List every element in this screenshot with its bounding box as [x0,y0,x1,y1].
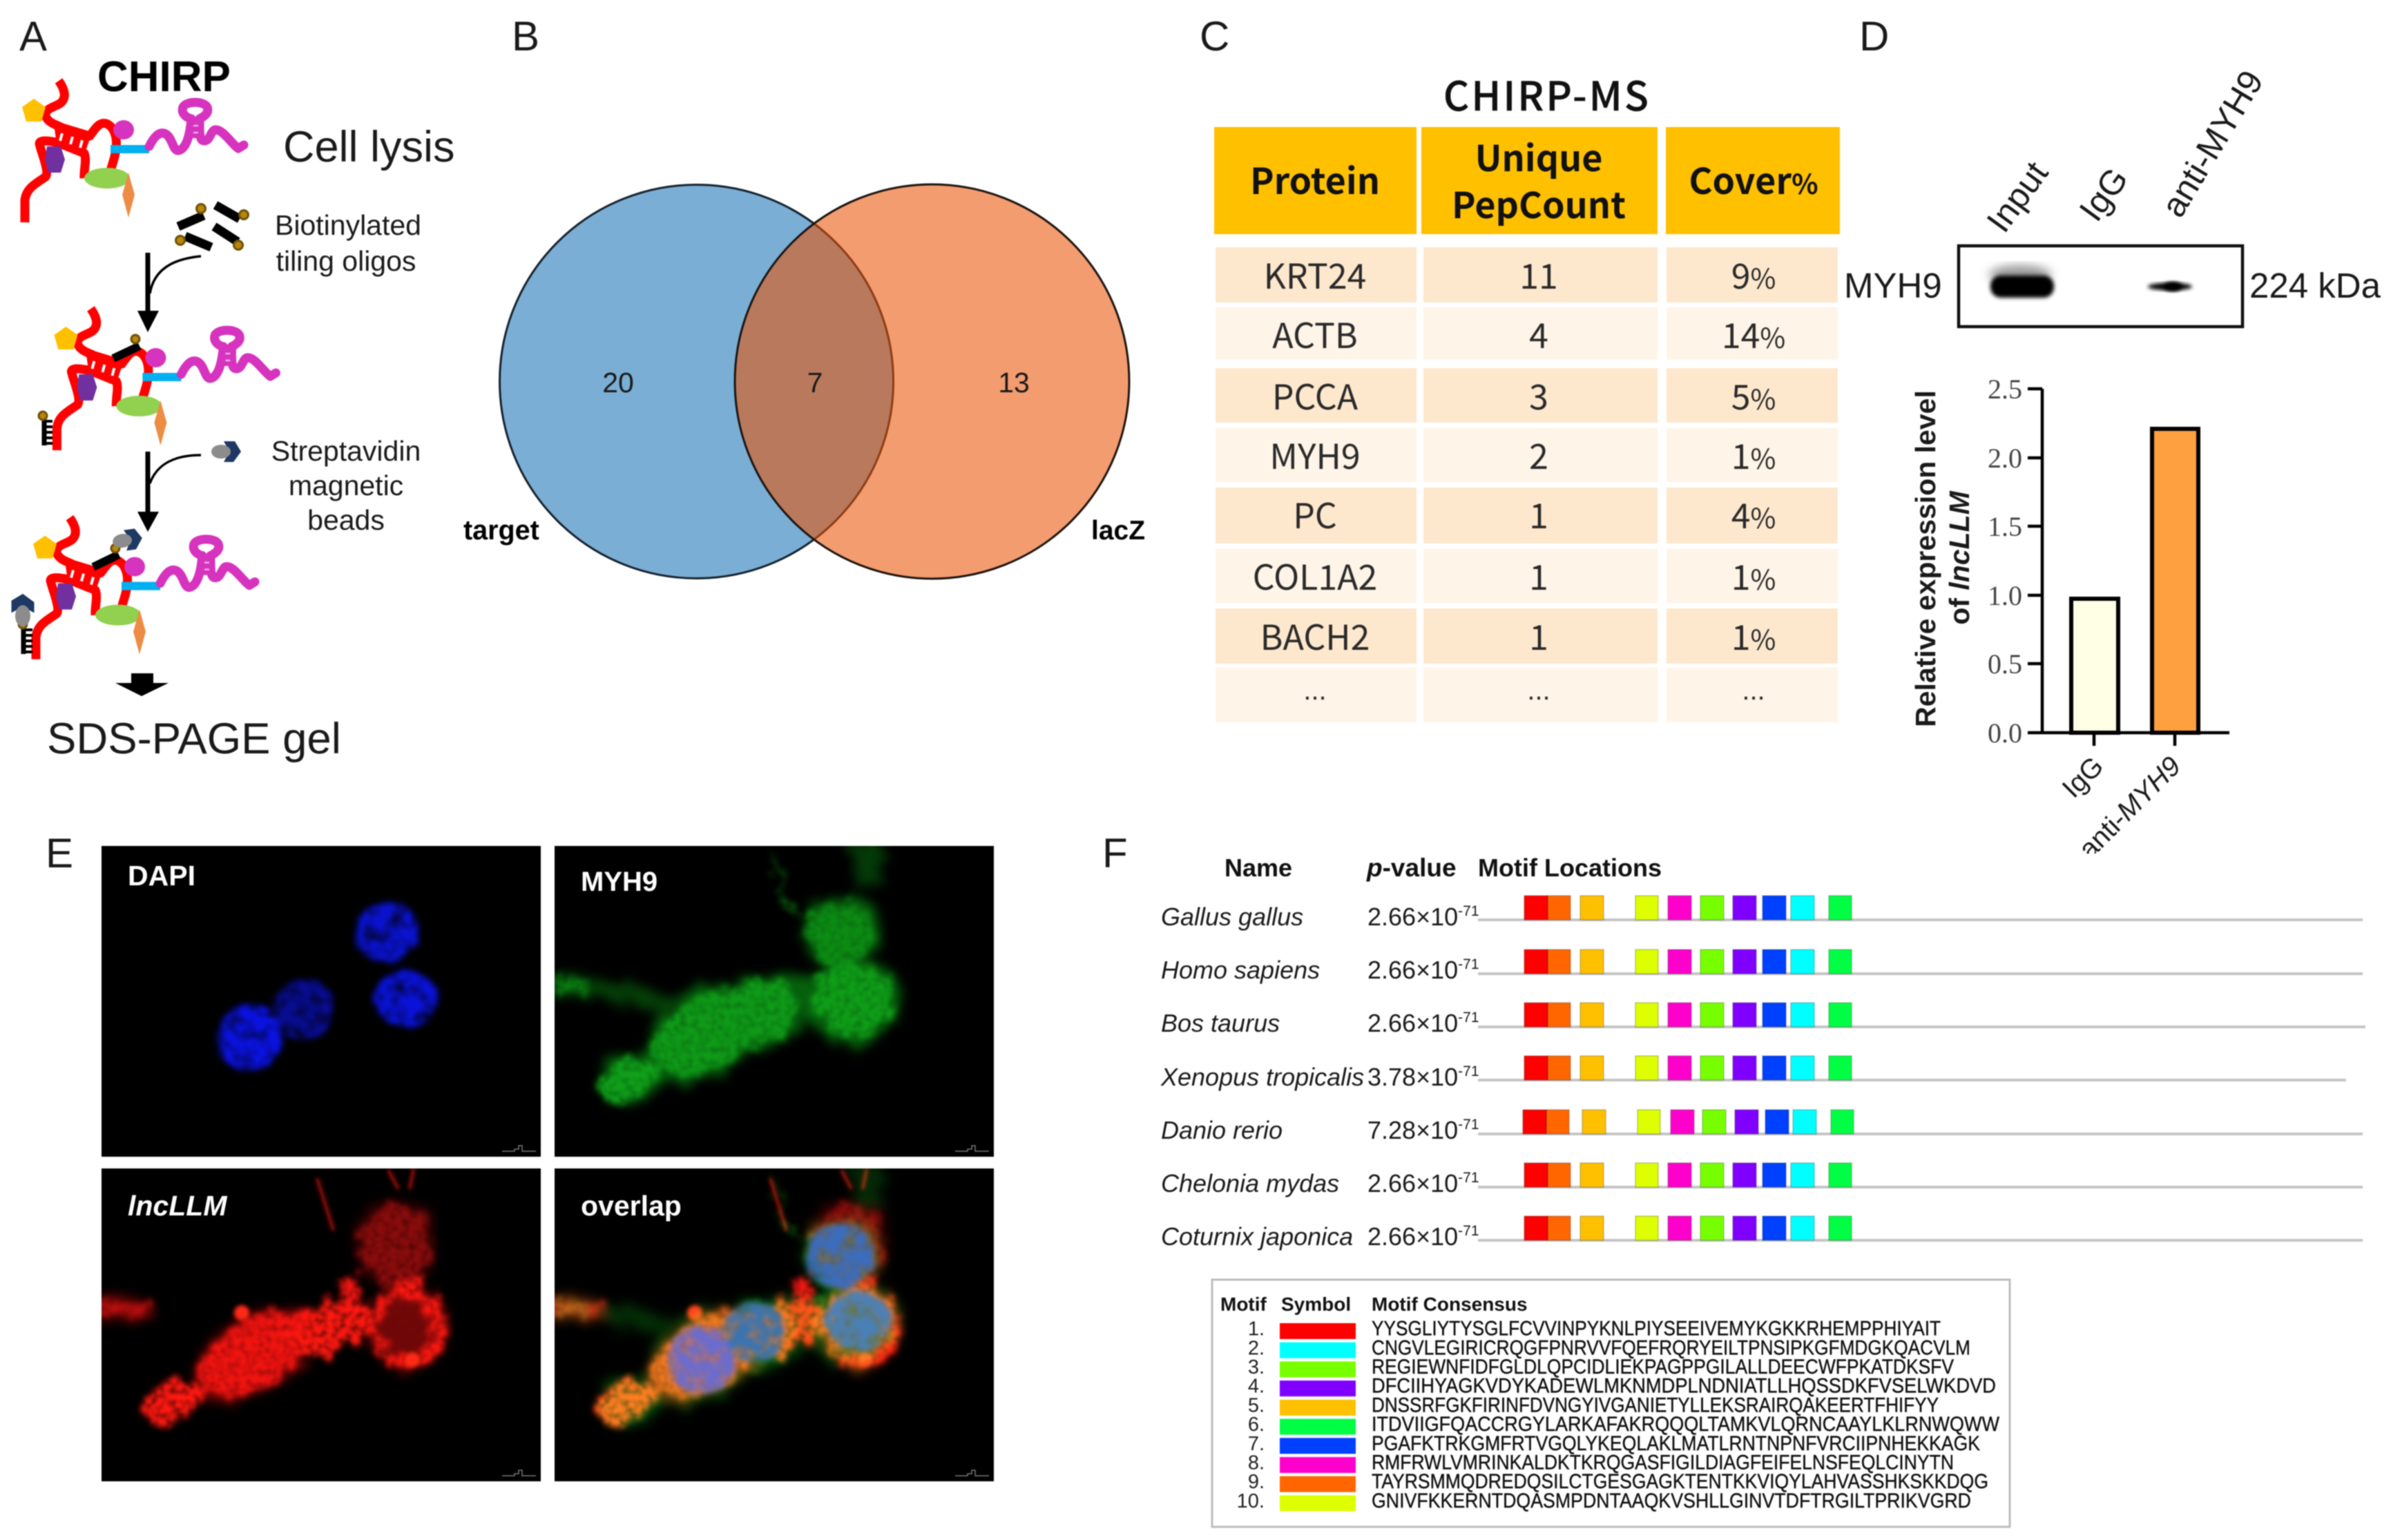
motif legend box [1212,1280,2010,1527]
row: Gallus gallus: Gallus gallus [1161,903,1303,931]
table body text: 1% [1731,610,1776,660]
axis title: Relative expression level [1910,390,1941,727]
value: lacZ only: 13 [998,367,1030,398]
legend consensus sequences: REGIEWNFIDFGLDLQPCIDLIEKPAGPPGILALLDEECWFPKATDKSFV [1372,1356,1954,1378]
table body text: COL1A2 [1253,550,1377,600]
table body text: 1% [1731,430,1776,479]
western blot box [1959,246,2243,327]
row: Gallus gallus [1161,896,2363,931]
bar: IgG [2071,599,2118,733]
table body text: 1 [1529,610,1548,660]
legend numbers: 1. [1248,1318,1265,1340]
table body text: 5% [1731,370,1776,420]
row: Coturnix japonica: -71 [1458,1223,1479,1239]
legend numbers [1237,1318,1265,1512]
label: biotinylated tiling oligos [275,209,421,277]
column headers: p-value [1366,854,1457,882]
legend numbers: 5. [1248,1394,1265,1416]
axis tick values: 0.0 [1988,718,2022,749]
panel label B: B [512,13,539,59]
image: DAPI: DAPI [128,860,195,892]
bar: anti-MYH9 [2152,429,2198,733]
axes [2028,389,2229,746]
icon: bound oligos second step [39,335,140,445]
legend consensus sequences: GNIVFKKERNTDQASMPDNTAAQKVSHLLGINVTDFTRGILTPRIKVGRD [1372,1490,1971,1512]
label: streptavidin magnetic beads: beads [307,504,385,536]
legend consensus sequences: PGAFKTRKGMFRTVGQLYKEQLAKLMATLRNTNPNFVRCIIPNHEKKAGK [1372,1432,1980,1455]
row: Xenopus tropicalis: Xenopus tropicalis [1160,1063,1364,1091]
arrow: to gel [115,673,169,696]
panel label C: C [1200,13,1229,59]
legend consensus sequences: RMFRWLVMRINKALDKTKRQGASFIGILDIAGFEIFELNSFEQLCINYTN [1372,1452,1954,1474]
axis tick values [1988,374,2022,749]
row: Coturnix japonica: Coturnix japonica [1161,1222,1353,1251]
table row backgrounds [1216,247,1838,722]
column headers: Motif Locations [1478,854,1662,882]
legend swatches [1280,1323,1356,1511]
table body text: MYH9 [1269,430,1361,479]
legend numbers: 8. [1248,1452,1265,1474]
row: Danio rerio: -71 [1458,1117,1479,1133]
label: lacZ: lacZ [1091,516,1145,546]
arrow: bead addition [137,452,201,532]
table body text: 9% [1731,249,1776,299]
axis tick values: 1.5 [1988,511,2022,542]
label: biotinylated tiling oligos: tiling oligos [276,245,416,277]
label: 224 kDa: 224 kDa [2249,266,2381,305]
molecule: with oligos bound [54,309,276,450]
circle: target [500,185,894,579]
image: MYH9 [551,843,994,1157]
panel label A: A [19,13,47,59]
legend consensus sequences: DFCIIHYAGKVDYKADEWLMKNMDPLNDNIATLLHQSSDKFVSELWKDVD [1372,1375,1996,1398]
legend consensus sequences: DNSSRFGKFIRINFDVNGYIVGANIETYLLEKSRAIRQAKEERTFHIFYY [1372,1394,1939,1416]
image: lncLLM [98,1168,541,1481]
label: streptavidin magnetic beads: Streptavidin [271,435,421,467]
row: Coturnix japonica [1161,1216,2363,1251]
column headers [1225,854,1662,882]
row: Bos taurus: 2.66×10 [1367,1009,1458,1037]
axis tick values: 2.5 [1988,374,2022,405]
label: streptavidin magnetic beads [271,435,421,536]
row: Chelonia mydas: -71 [1458,1170,1479,1186]
axis tick values: 1.0 [1988,580,2022,611]
panel label E: E [46,830,73,876]
panel B: Venn diagram [463,13,1145,579]
row: Danio rerio: 7.28×10 [1367,1116,1458,1144]
table body text: 4 [1529,309,1548,358]
table header: Cover% [1689,153,1818,204]
legend headers [1220,1293,1528,1315]
axis title [1910,390,1975,727]
image: overlap: overlap [581,1190,682,1222]
axis tick values: 0.5 [1988,648,2022,680]
legend headers: Motif [1220,1293,1267,1315]
table header [1214,127,1840,234]
blot lane labels: anti-MYH9 [2153,64,2271,224]
legend numbers: 2. [1248,1337,1265,1359]
molecule: lncRNA with proteins, cell lysis step [22,81,244,222]
axis title: of lncLLM [1943,490,1975,625]
row: Bos taurus: Bos taurus [1161,1009,1280,1037]
icon: streptavidin bead [211,441,241,462]
panel E: immunofluorescence images [46,830,994,1481]
icon: bound oligos with beads [11,528,144,654]
legend numbers: 3. [1248,1356,1265,1378]
legend numbers: 4. [1248,1376,1265,1398]
row: Gallus gallus: 2.66×10 [1367,903,1458,931]
legend consensus sequences [1372,1318,2000,1512]
category labels: anti-MYH9 [2073,751,2187,865]
value: overlap: 7 [807,367,823,398]
table body text: 11 [1519,249,1558,299]
table body text: 2 [1529,430,1548,479]
row: Danio rerio: Danio rerio [1161,1116,1283,1144]
table header: Protein [1250,153,1380,204]
row: Homo sapiens [1161,950,2363,984]
legend consensus sequences: YYSGLIYTYSGLFCVVINPYKNLPIYSEEIVEMYKGKKRHEMPPHIYAIT [1372,1318,1941,1340]
circle: lacZ [735,184,1129,579]
legend numbers: 9. [1248,1471,1265,1493]
row: Gallus gallus: -71 [1458,903,1479,919]
label: MYH9: MYH9 [1844,266,1942,305]
legend headers: Motif Consensus [1372,1293,1528,1315]
image: lncLLM: lncLLM [128,1190,227,1222]
axis tick values: 2.0 [1988,443,2022,474]
row: Homo sapiens: -71 [1458,956,1479,972]
label: biotinylated tiling oligos: Biotinylated [275,209,421,241]
row: Chelonia mydas: Chelonia mydas [1161,1169,1339,1197]
table body text: 4% [1731,489,1776,539]
panel D: western blot and bar chart [1844,13,2381,865]
table body text: BACH2 [1260,610,1370,660]
row: Chelonia mydas [1161,1163,2363,1197]
table body text: KRT24 [1264,249,1366,299]
panel F: motif analysis [1102,830,2365,1527]
image: overlap [551,1165,994,1481]
panel label D: D [1859,13,1889,59]
panel A: CHIRP workflow [11,13,455,763]
bar chart [1910,374,2229,865]
legend headers: Symbol [1281,1293,1351,1315]
table body text: PCCA [1272,370,1358,420]
table body text [1253,249,1785,706]
table body text: ... [1303,675,1327,706]
row: Bos taurus [1161,1003,2365,1037]
table header: Unique [1475,130,1602,182]
row: Chelonia mydas: 2.66×10 [1367,1169,1458,1197]
heading: CHIRP: CHIRP [97,53,231,101]
molecule: with oligos and beads [33,518,255,660]
icon: biotinylated oligos [175,204,249,250]
label: cell lysis: Cell lysis [283,123,455,171]
row: Xenopus tropicalis: -71 [1458,1063,1479,1079]
table body text: 14% [1722,309,1785,358]
table body text: ... [1742,675,1765,706]
category labels: IgG [2057,751,2109,804]
row: Homo sapiens: 2.66×10 [1367,956,1458,984]
row: Coturnix japonica: 2.66×10 [1367,1222,1458,1251]
value: target only: 20 [602,367,634,398]
table body text: ACTB [1272,309,1358,358]
label: target: target [463,515,539,546]
table body text: PC [1293,489,1337,539]
blot lane labels: IgG [2072,160,2135,228]
blot lane labels [1979,64,2271,239]
legend numbers: 10. [1237,1490,1265,1512]
table title: CHIRP-MS [1443,64,1651,122]
label: streptavidin magnetic beads: magnetic [289,470,403,501]
legend consensus sequences: TAYRSMMQDREDQSILCTGESGAGKTENTKKVIQYLAHVASSHKSKKDQG [1372,1470,1988,1493]
row: Danio rerio [1161,1110,2363,1144]
row: Xenopus tropicalis: 3.78×10 [1367,1063,1458,1091]
legend consensus sequences: CNGVLEGIRICRQGFPNRVVFQEFRQRYEILTPNSIPKGFMDGKQACVLM [1372,1336,1970,1359]
legend numbers: 7. [1248,1433,1265,1455]
legend consensus sequences: ITDVIIGFQACCRGYLARKAFAKRQQQLTAMKVLQRNCAAYLKLRNWQWW [1372,1413,2000,1436]
arrow: oligo addition [137,253,201,332]
column headers: Name [1225,854,1292,882]
label: SDS-PAGE gel: SDS-PAGE gel [47,715,341,763]
table body text: 1 [1529,489,1548,539]
panel C: CHIRP-MS table [1200,13,1840,722]
panel label F: F [1102,830,1128,876]
row: Xenopus tropicalis [1160,1056,2346,1091]
blot lane labels: Input [1979,154,2055,239]
image: MYH9: MYH9 [581,867,657,897]
table body text: 3 [1529,370,1548,420]
table header: PepCount [1452,177,1626,229]
table body text: 1 [1529,550,1548,600]
table body text: 1% [1731,550,1776,600]
table body text: ... [1527,675,1550,706]
image: DAPI [102,846,541,1157]
row: Homo sapiens: Homo sapiens [1161,956,1320,984]
legend numbers: 6. [1248,1414,1265,1436]
row: Bos taurus: -71 [1458,1010,1479,1026]
